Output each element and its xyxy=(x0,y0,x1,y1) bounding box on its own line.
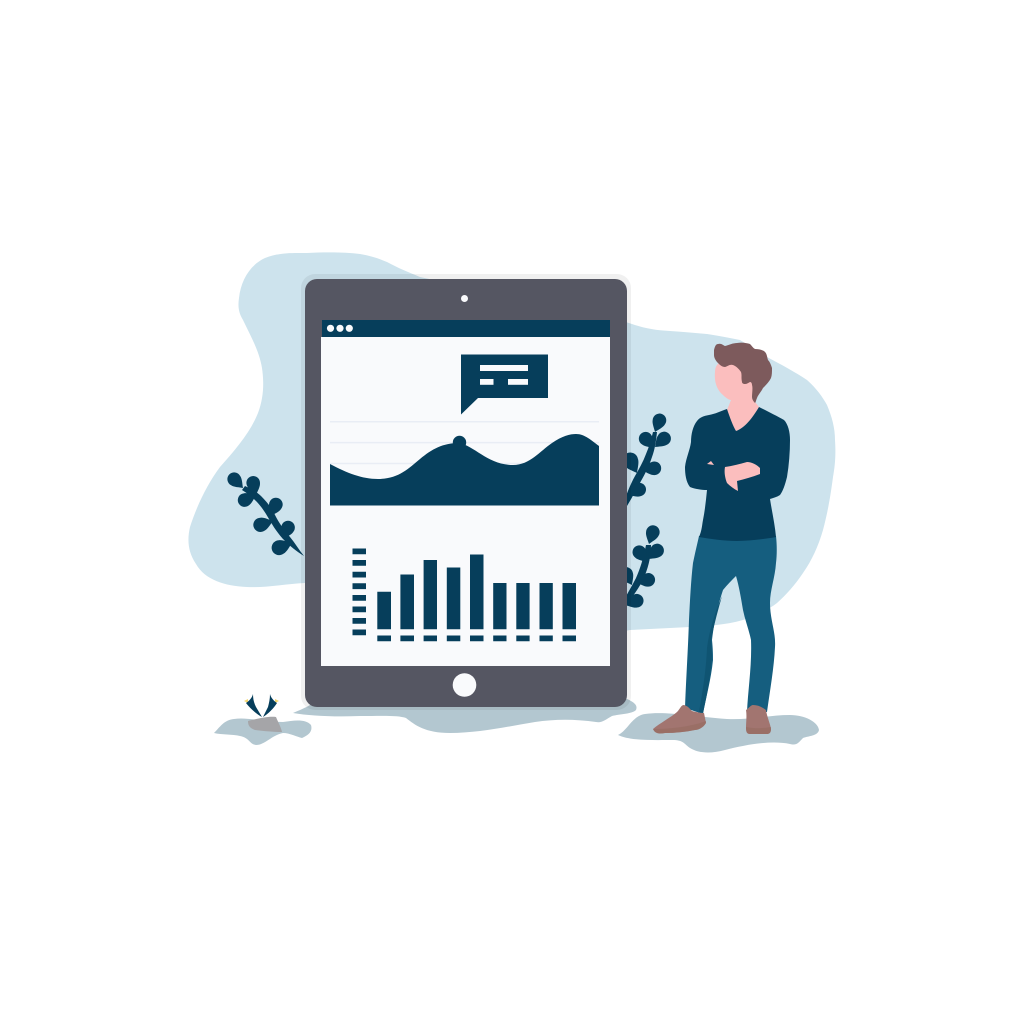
x axis ticks xyxy=(377,636,576,641)
tablet xyxy=(301,274,631,710)
screen xyxy=(321,337,610,666)
plant: right lower xyxy=(617,524,667,611)
neck and face xyxy=(715,359,759,431)
pants fold xyxy=(699,596,722,713)
ground shadow: left xyxy=(214,719,311,745)
shoe right sole xyxy=(746,727,771,734)
home button xyxy=(453,673,476,697)
plant: left xyxy=(225,470,304,557)
y axis ticks xyxy=(352,548,366,635)
shoe left sole xyxy=(653,721,706,734)
hair xyxy=(714,343,772,403)
sprout leaves xyxy=(246,694,277,717)
ground shadow: person xyxy=(618,713,819,752)
rock xyxy=(248,717,282,732)
speech bubble xyxy=(461,354,548,414)
background blob xyxy=(188,252,835,632)
area chart xyxy=(330,422,599,506)
ground shadow: tablet xyxy=(293,698,637,733)
window header bar xyxy=(322,320,610,337)
pants xyxy=(685,536,777,714)
plant: right upper xyxy=(620,412,674,506)
shoe right xyxy=(746,705,771,734)
sweater xyxy=(685,407,790,541)
tablet body xyxy=(305,279,627,707)
bar chart xyxy=(352,548,576,641)
shoe left xyxy=(653,705,706,734)
camera xyxy=(461,295,468,302)
tablet shadow edge xyxy=(301,274,631,710)
flower and rock xyxy=(244,694,282,732)
crossed arm and hands xyxy=(707,461,760,491)
yellow buds xyxy=(244,699,279,703)
bars xyxy=(377,554,576,629)
person xyxy=(653,343,790,734)
